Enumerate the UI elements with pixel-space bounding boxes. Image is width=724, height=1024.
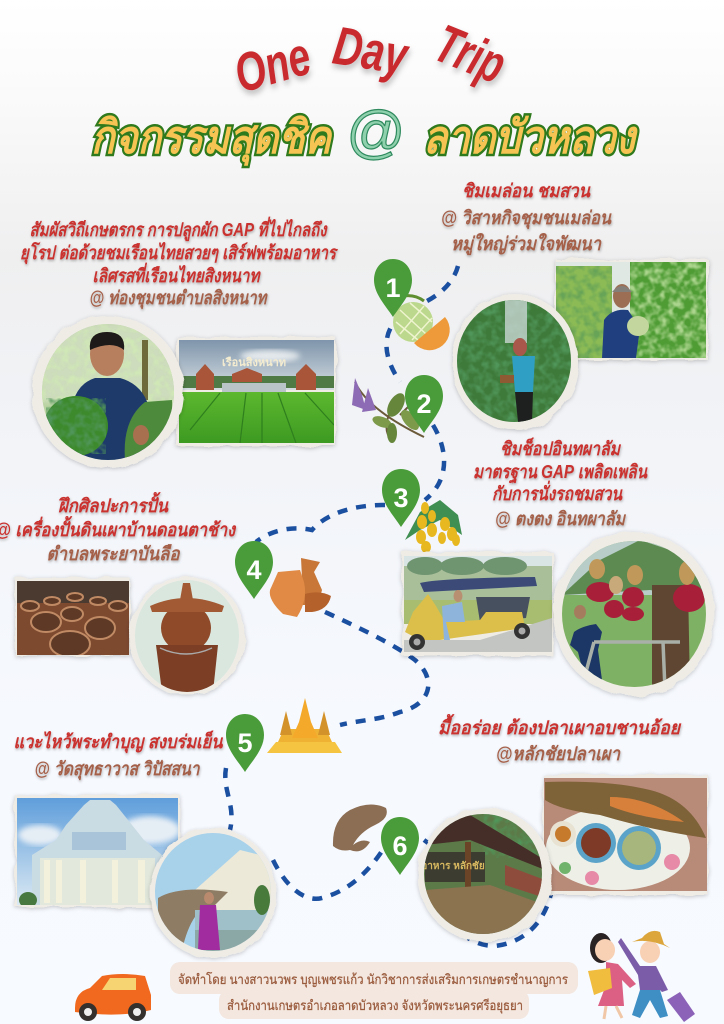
text block: stop 1 melon: @ วิสาหกิจชุมชนเมล่อน <box>441 207 612 230</box>
text block: stop 3 dates <box>473 437 648 529</box>
text block: stop 5 temple <box>14 730 224 781</box>
photo: woman at white temple <box>150 828 280 960</box>
pin 3: 3 <box>393 483 409 513</box>
footer credit box: จัดทำโดย นางสาวนวพร บุญเพชรแก้ว นักวิชาการส่งเสริมการเกษตรชำนาญการ <box>178 971 568 988</box>
text block: stop 3 dates: กับการนั่งรถชมสวน <box>492 480 623 504</box>
icon: clay jars <box>270 558 331 617</box>
text block: stop 1 melon: หมู่ใหญ่ร่วมใจพัฒนา <box>451 233 602 256</box>
photo: date palm with red fruit <box>553 532 715 696</box>
footer credit box <box>170 962 578 1019</box>
title: One Day Trip: Day <box>329 16 414 87</box>
photo: melon greenhouse with farmer <box>555 259 708 360</box>
pin 1 <box>374 259 412 317</box>
footer credit box: สำนักงานเกษตรอำเภอลาดบัวหลวง จังหวัดพระนครศรีอยุธยา <box>227 998 523 1014</box>
photo: white temple <box>15 795 180 908</box>
pin 6 <box>381 817 419 875</box>
title: One Day Trip <box>228 13 514 105</box>
text block: stop 6 grilled fish: @หลักชัยปลาเผา <box>496 743 621 764</box>
text block: stop 1 melon: ชิมเมล่อน ชมสวน <box>462 180 591 201</box>
pin 4 <box>235 541 273 599</box>
photo: tuk-tuk in date garden <box>402 552 553 656</box>
pin 6: 6 <box>392 831 408 861</box>
photo: grilled fish and dipping sauces <box>543 775 708 895</box>
dashed route <box>225 266 552 946</box>
pin 1: 1 <box>385 273 401 303</box>
heading: Thai subtitle: ลาดบัวหลวง <box>423 111 638 163</box>
photo: rice field and Thai houses <box>176 337 336 446</box>
pin 2: 2 <box>416 389 432 419</box>
text block: stop 6 grilled fish <box>438 714 682 764</box>
text block: stop 2 farm: สัมผัสวิถีเกษตรกร การปลูกผัก GAP ที่ไปไกลถึง <box>30 216 328 242</box>
icon: date palm fruit <box>405 500 462 553</box>
pin 5: 5 <box>237 728 253 758</box>
icon: orange car <box>75 974 151 1021</box>
icon: golden temple <box>267 698 342 753</box>
icon: two travellers <box>588 931 695 1022</box>
text block: stop 2 farm: ยุโรป ต่อด้วยชมเรือนไทยสวยๆ เสิร์ฟพร้อมอาหาร <box>20 241 338 265</box>
text block: stop 2 farm: @ ท่องชุมชนตำบลสิงหนาท <box>90 287 268 310</box>
text block: stop 5 temple: แวะไหว้พระทำบุญ สงบร่มเย็น <box>14 730 224 754</box>
pin 5 <box>226 714 264 772</box>
text block: stop 2 farm: เลิศรสที่เรือนไทยสิงหนาท <box>92 262 261 286</box>
text block: stop 6 grilled fish: มื้ออร่อย ต้องปลาเผาอบชานอ้อย <box>438 714 682 738</box>
text block: stop 4 pottery: @ เครื่องปั้นดินเผาบ้านดอนตาช้าง <box>0 516 237 540</box>
text block: stop 1 melon <box>441 180 612 256</box>
icon: herb sprig <box>352 378 424 443</box>
text block: stop 4 pottery <box>0 492 237 564</box>
text block: stop 4 pottery: ตำบลพระยาบันลือ <box>46 543 181 564</box>
pin 3 <box>382 469 420 527</box>
icon: brown grilled fish <box>333 804 387 851</box>
photo: woman in melon greenhouse <box>452 294 580 430</box>
heading: Thai subtitle: กิจกรรมสุดชิค <box>91 111 333 166</box>
pin 4: 4 <box>246 555 262 585</box>
photo: restaurant sign and garden: อาหาร หลักชัย <box>421 860 485 872</box>
photo: clay stove and pot <box>129 577 245 695</box>
pin 2 <box>405 375 443 433</box>
text block: stop 3 dates: ชิมช็อปอินทผาลัม <box>500 437 622 459</box>
text block: stop 2 farm <box>20 216 338 310</box>
text block: stop 3 dates: มาตรฐาน GAP เพลิดเพลิน <box>473 461 648 484</box>
photo: farmer with vegetables <box>32 316 184 468</box>
text block: stop 4 pottery: ฝึกศิลปะการปั้น <box>58 492 169 516</box>
icon: melon <box>393 296 450 350</box>
photo: rows of clay pots <box>15 578 130 657</box>
heading: Thai subtitle <box>91 100 638 166</box>
photo: rice field and Thai houses: เรือนสิงหนาท <box>222 356 286 369</box>
text block: stop 3 dates: @ ตงตง อินทผาลัม <box>495 508 627 529</box>
title: One Day Trip: Trip <box>427 13 514 95</box>
text block: stop 5 temple: @ วัดสุทธาวาส วิปัสสนา <box>34 758 201 781</box>
title: One Day Trip: One <box>228 26 317 105</box>
photo: restaurant sign and garden <box>418 808 555 945</box>
heading: Thai subtitle: @ <box>347 100 405 165</box>
